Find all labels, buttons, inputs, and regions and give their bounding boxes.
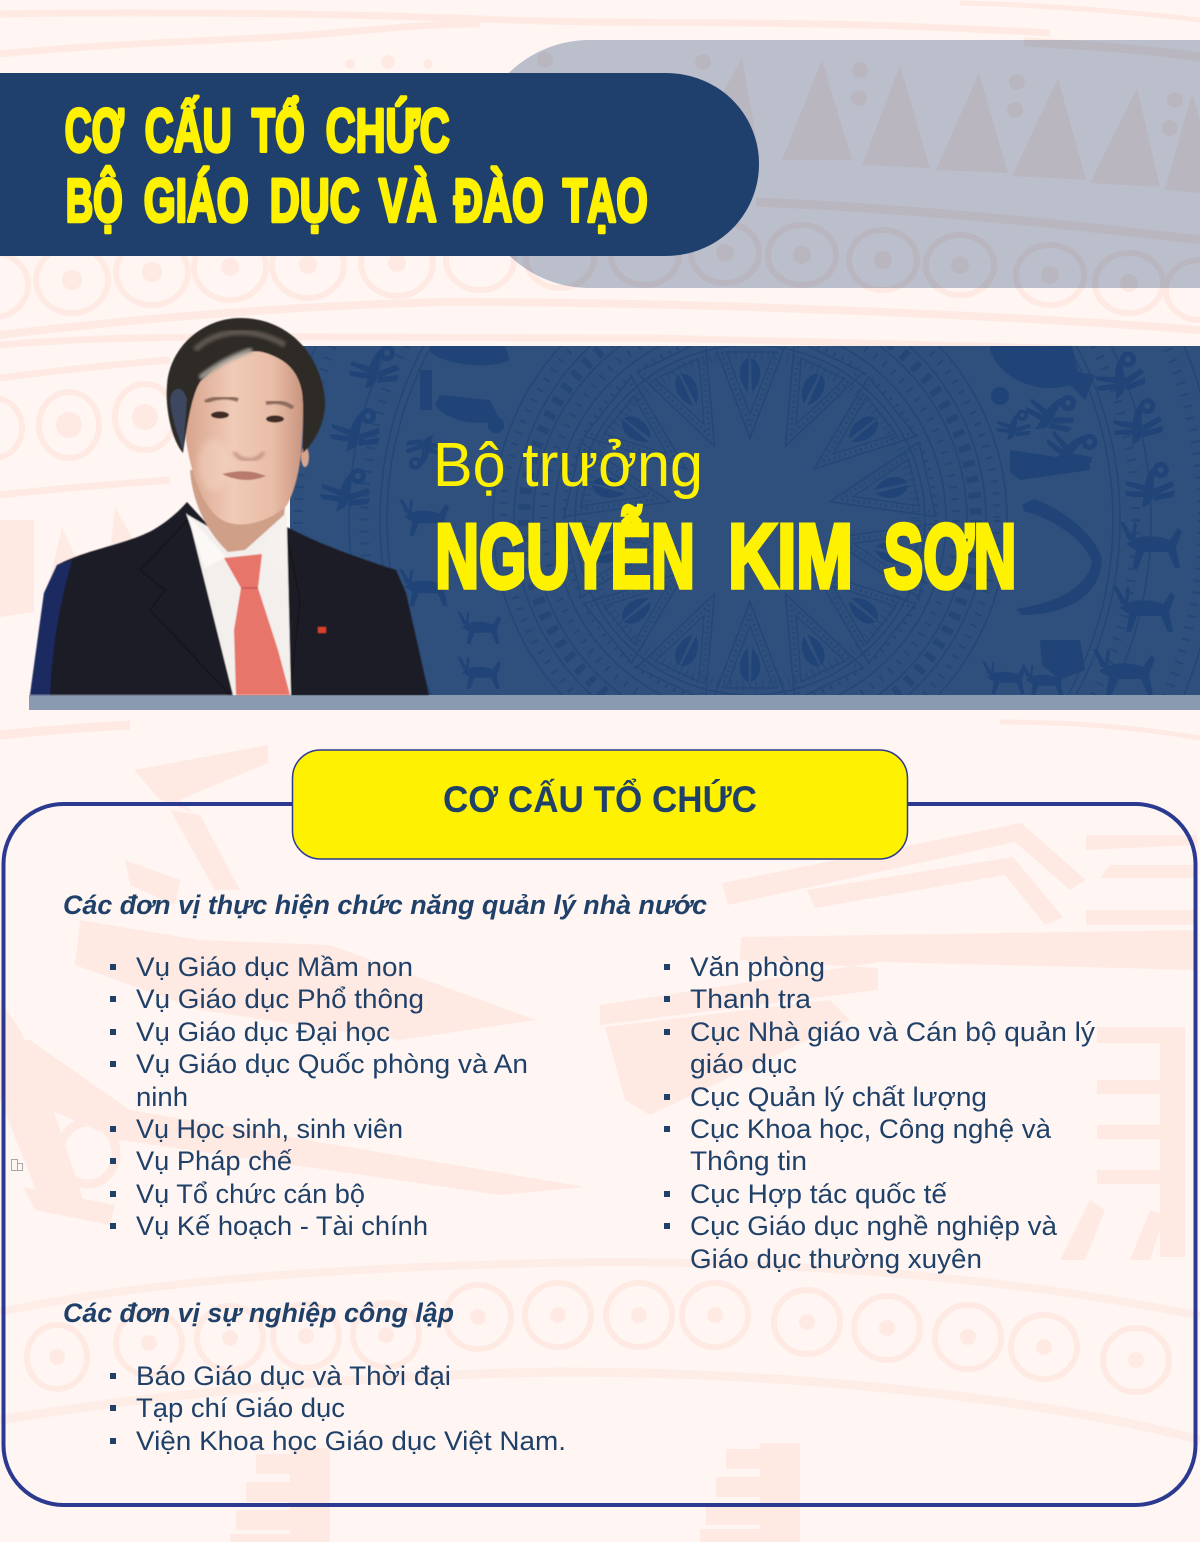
lapel pin bbox=[318, 627, 326, 633]
minister name: KIM bbox=[728, 507, 853, 608]
title: ĐÀO bbox=[454, 166, 544, 234]
title: GIÁO bbox=[144, 166, 249, 234]
title bbox=[65, 96, 648, 234]
subheading: state management units: Các đơn vị thực hiện chức năng quản lý nhà nước bbox=[63, 890, 707, 920]
list: public service units: Báo Giáo dục và Thời đại bbox=[136, 1361, 451, 1391]
title: TẠO bbox=[563, 166, 648, 234]
bronze drum pattern bbox=[294, 346, 1200, 695]
list: left column: ninh bbox=[136, 1082, 188, 1112]
list: right column: Cục Hợp tác quốc tế bbox=[690, 1179, 947, 1209]
list: public service units: Viện Khoa học Giáo dục Việt Nam. bbox=[136, 1426, 566, 1456]
birds and animals bbox=[1096, 352, 1145, 400]
list: left column: Vụ Pháp chế bbox=[136, 1146, 292, 1176]
title: CẤU bbox=[145, 96, 232, 164]
list: left column: Vụ Giáo dục Phổ thông bbox=[136, 984, 424, 1014]
list: right column: Thanh tra bbox=[690, 984, 812, 1014]
title: VÀ bbox=[379, 166, 437, 234]
list: public service units bbox=[110, 1361, 566, 1456]
minister name: Bộ trưởng bbox=[433, 431, 703, 500]
title: CHỨC bbox=[326, 96, 450, 164]
bird left bbox=[134, 745, 268, 812]
list: public service units: Tạp chí Giáo dục bbox=[136, 1393, 345, 1423]
list: left column: Vụ Giáo dục Đại học bbox=[136, 1017, 390, 1047]
list: right column: Cục Khoa học, Công nghệ và bbox=[690, 1114, 1052, 1144]
title: CƠ bbox=[65, 96, 124, 164]
header: navy title pill bbox=[0, 73, 759, 256]
shirt and collar bbox=[188, 505, 291, 695]
panel heading bbox=[292, 750, 908, 859]
minister banner bbox=[290, 346, 1200, 695]
title: TỔ bbox=[252, 96, 305, 164]
list: right column: Thông tin bbox=[690, 1146, 807, 1176]
list: right column: Cục Nhà giáo và Cán bộ quản lý bbox=[690, 1017, 1096, 1047]
facial features bbox=[205, 398, 293, 480]
list: left column bbox=[110, 952, 528, 1241]
title: BỘ bbox=[66, 166, 123, 234]
title: DỤC bbox=[270, 166, 360, 234]
list: left column: Vụ Tổ chức cán bộ bbox=[136, 1179, 365, 1209]
list: right column: Giáo dục thường xuyên bbox=[690, 1244, 982, 1274]
list: right column: giáo dục bbox=[690, 1049, 797, 1079]
panel: organisational structure bbox=[4, 750, 1196, 1505]
hair bbox=[167, 318, 325, 453]
tie bbox=[224, 554, 290, 695]
bird right bbox=[722, 823, 1086, 905]
icon: small stray mark bbox=[12, 1160, 22, 1170]
minister name: NGUYỄN bbox=[435, 506, 695, 608]
list: right column: Cục Quản lý chất lượng bbox=[690, 1082, 987, 1112]
list: right column: Văn phòng bbox=[690, 952, 825, 982]
list: left column: Vụ Giáo dục Quốc phòng và An bbox=[136, 1049, 528, 1079]
triangle row bbox=[685, 58, 760, 160]
suit bbox=[30, 502, 429, 695]
minister name bbox=[433, 431, 1016, 608]
neck and face bbox=[190, 470, 290, 552]
minister name: SƠN bbox=[884, 507, 1016, 608]
header: translucent background pill bbox=[470, 40, 1200, 288]
banner bottom bar bbox=[29, 695, 1200, 710]
ring dots bbox=[62, 270, 82, 290]
list: left column: Vụ Kế hoạch - Tài chính bbox=[136, 1211, 428, 1241]
list: left column: Vụ Học sinh, sinh viên bbox=[136, 1114, 403, 1144]
subheading: public service units: Các đơn vị sự nghiệp công lập bbox=[63, 1298, 454, 1328]
panel heading: CƠ CẤU TỔ CHỨC bbox=[443, 777, 757, 820]
list: left column: Vụ Giáo dục Mầm non bbox=[136, 952, 413, 982]
portrait of the minister bbox=[30, 318, 429, 695]
list: right column bbox=[664, 952, 1096, 1274]
list: right column: Cục Giáo dục nghề nghiệp và bbox=[690, 1211, 1058, 1241]
